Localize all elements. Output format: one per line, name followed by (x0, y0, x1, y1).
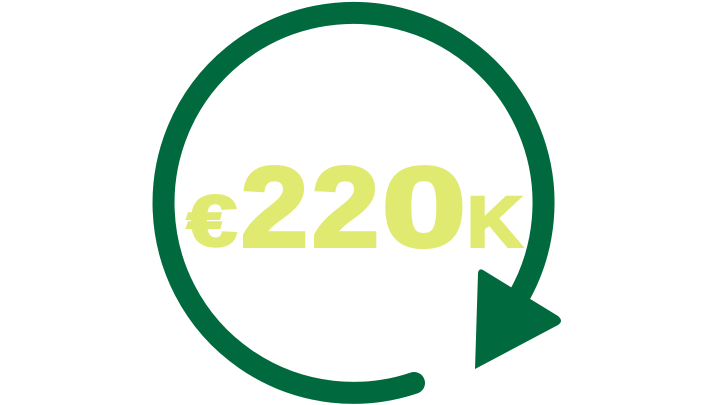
number 220 (241, 144, 466, 270)
arrow head (475, 269, 561, 369)
number 220: 2 (241, 144, 308, 270)
thousand suffix: K (467, 184, 522, 262)
euro sign: € (187, 182, 237, 262)
arrow ring (164, 13, 544, 393)
number 220: 0 (382, 144, 466, 270)
amount text (187, 144, 522, 270)
circular arrow (164, 13, 561, 393)
number 220: 2 (312, 144, 379, 270)
